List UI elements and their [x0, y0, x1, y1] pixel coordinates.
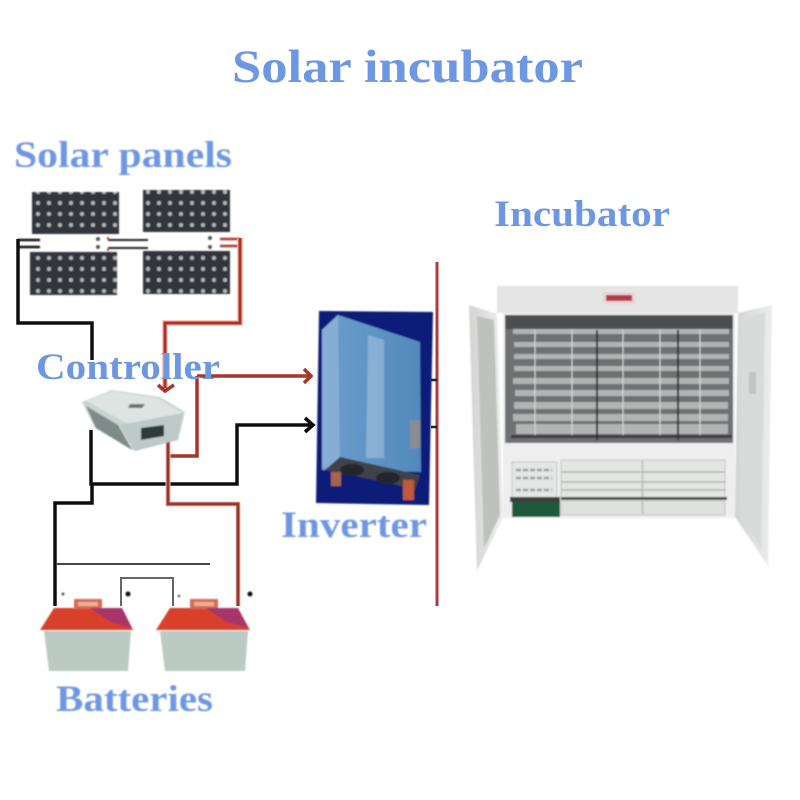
- left door: [469, 305, 503, 571]
- cabinet header: [497, 286, 738, 313]
- battery left: [40, 599, 133, 671]
- inverter photo: [316, 311, 433, 505]
- label: batteries: Batteries: [56, 679, 213, 720]
- label: solar panels: Solar panels: [14, 135, 232, 176]
- label: controller: Controller: [36, 347, 220, 388]
- panel: incubator cabinet: [469, 286, 772, 571]
- title: Solar incubator: [232, 41, 583, 93]
- wire: controller to battery red: [168, 438, 238, 606]
- battery right: [156, 599, 250, 671]
- wire: battery link: [121, 578, 173, 606]
- wire: panels to controller red: [165, 238, 240, 388]
- arrow: controller to inverter black: [91, 418, 313, 484]
- wiring: [18, 238, 313, 606]
- cabinet interior: [503, 313, 735, 518]
- label: inverter: Inverter: [281, 505, 427, 546]
- egg trays: [513, 329, 729, 434]
- wire: controller to battery black: [55, 484, 92, 606]
- panel: inverter: [281, 311, 433, 546]
- lower trays: [510, 460, 727, 517]
- panel: solar panels: [14, 135, 240, 295]
- panel: batteries: [40, 592, 252, 720]
- solar panel array: [18, 190, 240, 295]
- wire: battery thin line: [56, 563, 210, 565]
- right door: [735, 305, 772, 566]
- bus line: [431, 262, 437, 606]
- label: incubator: Incubator: [494, 194, 670, 235]
- icon: controller box: [82, 390, 185, 451]
- arrow: controller to inverter red: [158, 369, 311, 456]
- wire: panels to controller black: [18, 239, 92, 360]
